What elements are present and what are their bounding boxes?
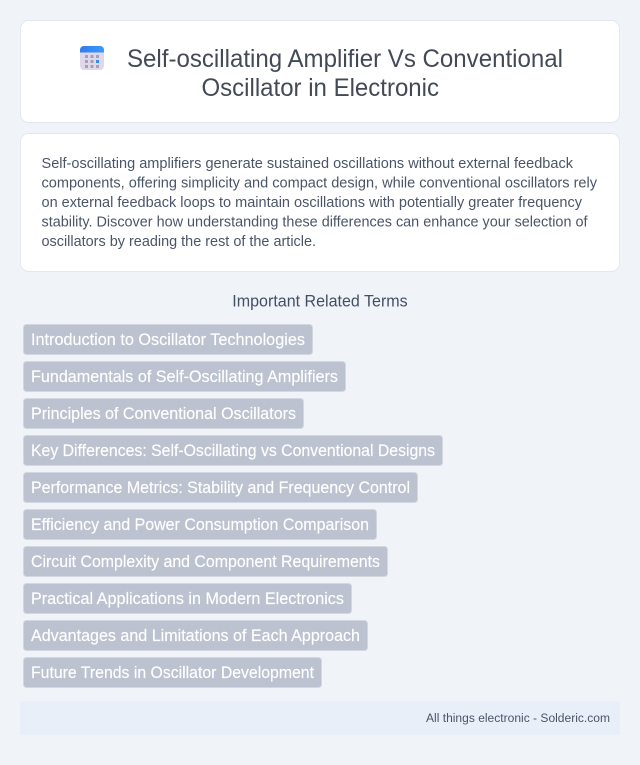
chip: principles: Principles of Conventional Oscillators: [31, 404, 296, 423]
chip: efficiency: Efficiency and Power Consumption Comparison: [31, 515, 369, 534]
chip: practical applications: Practical Applications in Modern Electronics: [31, 589, 344, 608]
chip: advantages: [24, 620, 368, 650]
chip: future trends: Future Trends in Oscillator Development: [31, 663, 314, 682]
chip: performance metrics: [24, 472, 418, 502]
chip: efficiency: [24, 510, 376, 540]
chip: principles: [24, 398, 304, 428]
intro text: stability. Discover how understanding these differences can enhance your selection of: [42, 214, 588, 230]
intro text: [42, 156, 598, 250]
icon: calendar: [80, 46, 104, 70]
chip: introduction: [24, 324, 312, 354]
chip: future trends: [24, 658, 322, 688]
panel: intro paragraph card: [20, 134, 620, 272]
title: Oscillator in Electronic: [202, 75, 439, 102]
chip: circuit complexity: [24, 546, 388, 576]
footer text: All things electronic - Solderic.com: [426, 711, 610, 725]
footer bar: [20, 701, 620, 735]
title: Self-oscillating Amplifier Vs Conventional: [127, 46, 563, 73]
heading: important related terms: Important Related Terms: [232, 292, 408, 310]
chip: circuit complexity: Circuit Complexity and Component Requirements: [31, 552, 380, 571]
chip: introduction: Introduction to Oscillator Technologies: [31, 330, 305, 349]
title: [127, 46, 563, 102]
list: related term chips: [24, 324, 442, 688]
intro text: Self-oscillating amplifiers generate sustained oscillations without external feedback: [42, 156, 574, 172]
intro text: oscillators by reading the rest of the article.: [42, 234, 316, 250]
chip: practical applications: [24, 584, 352, 614]
chip: key differences: Key Differences: Self-Oscillating vs Conventional Designs: [31, 441, 435, 460]
chip: fundamentals: Fundamentals of Self-Oscillating Amplifiers: [31, 367, 338, 386]
intro text: components, offering simplicity and compact design, while conventional oscillators rely: [42, 176, 598, 192]
chip: fundamentals: [24, 362, 346, 392]
chip: key differences: [24, 436, 442, 466]
chip: advantages: Advantages and Limitations of Each Approach: [31, 626, 360, 645]
chip: performance metrics: Performance Metrics: Stability and Frequency Control: [31, 478, 410, 497]
intro text: on external feedback loops to maintain oscillations with potentially greater frequency: [42, 195, 583, 211]
panel: header card: [20, 20, 620, 122]
